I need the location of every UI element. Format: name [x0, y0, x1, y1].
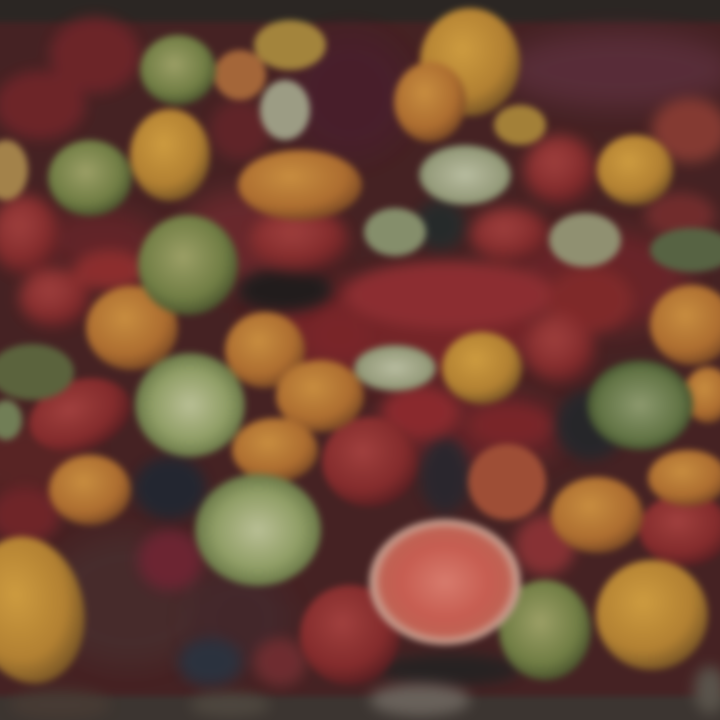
kiwi slice, bottom center — [195, 474, 321, 586]
orange fruit, bottom right — [596, 560, 708, 670]
grapefruit slice — [369, 519, 521, 645]
orange fruits, center and left — [49, 286, 364, 525]
yellow and orange fruits, top — [0, 8, 673, 220]
kiwi slice, right — [587, 360, 693, 450]
kiwi slices — [135, 353, 693, 586]
large yellow fruit, bottom left — [0, 526, 98, 694]
pale lime slices — [260, 80, 621, 391]
orange fruits, right — [442, 285, 720, 553]
bottom edge tones — [10, 666, 720, 719]
kiwi slice, center left — [135, 353, 245, 457]
red apples — [20, 366, 720, 685]
dark blueberry — [134, 457, 206, 519]
